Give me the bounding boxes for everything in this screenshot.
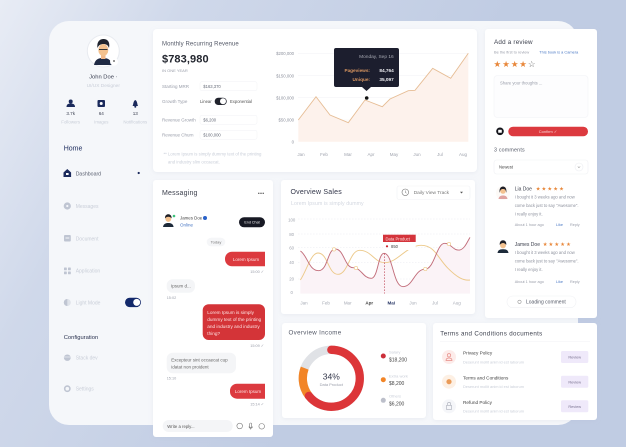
nav: application: Application bbox=[76, 269, 100, 275]
line chart: sales: Jan bbox=[300, 300, 308, 306]
line chart: sales: Jun bbox=[409, 300, 417, 306]
area chart: revenue: 0 bbox=[292, 139, 295, 144]
row: terms and conditions: Deserunt mollit anim id est laborum bbox=[463, 384, 524, 389]
panel: monthly recurring revenue bbox=[153, 29, 477, 172]
line chart: sales: Jul bbox=[432, 300, 438, 306]
income legend: $8,200 bbox=[389, 381, 405, 387]
comment: lia doe: Like bbox=[556, 223, 563, 227]
rating stars: ★ bbox=[493, 60, 501, 70]
bubble: sent 2: and industry and industry bbox=[207, 324, 260, 329]
sales subtitle: Lorem Ipsum is simply dummy bbox=[291, 201, 364, 207]
donut chart: 34% bbox=[323, 372, 340, 382]
nav: settings: Settings bbox=[76, 387, 94, 393]
mrr title: Monthly Recurring Revenue bbox=[162, 41, 239, 47]
stat: notifications bbox=[123, 100, 148, 124]
bubble: received 2 bbox=[167, 353, 236, 380]
chat contact: Online bbox=[180, 222, 194, 228]
daily view dropdown bbox=[397, 186, 470, 200]
area chart: revenue: Aug bbox=[459, 152, 467, 157]
nav: light mode bbox=[64, 298, 141, 307]
profile role: UI/UX Designer bbox=[87, 83, 120, 89]
line chart: sales: 40 bbox=[289, 260, 295, 265]
line chart: sales: 0 bbox=[291, 290, 294, 295]
income legend bbox=[381, 350, 408, 408]
row: refund policy: Review bbox=[568, 404, 581, 409]
comment: james doe: About 1 hour ago bbox=[515, 280, 544, 284]
nav: messages bbox=[64, 202, 99, 210]
nav: messages: Messages bbox=[76, 204, 99, 210]
rating stars bbox=[493, 60, 536, 70]
main panel bbox=[49, 21, 578, 425]
rating stars: ★ bbox=[519, 60, 527, 70]
line chart: sales bbox=[288, 218, 470, 306]
area chart: revenue bbox=[276, 48, 468, 157]
chart tooltip: 35,097 bbox=[379, 77, 394, 82]
chart tooltip: 84,764 bbox=[379, 68, 394, 73]
row: terms and conditions: Terms and Conditions bbox=[463, 375, 509, 380]
comment: james doe bbox=[498, 240, 580, 284]
area chart: revenue: $200,000 bbox=[276, 51, 295, 56]
bubble: received 1: Ipsum d... bbox=[171, 284, 191, 289]
mrr form fields bbox=[162, 82, 257, 139]
panel: overview sales bbox=[281, 180, 475, 314]
panel: terms and conditions bbox=[433, 323, 597, 420]
stat: followers: Followers bbox=[61, 120, 81, 124]
bubble: sent 2: 15:09 ✓ bbox=[250, 344, 264, 348]
mrr footnote bbox=[164, 151, 262, 165]
chart tooltip bbox=[334, 48, 399, 100]
mrr form fields: Growth Type bbox=[162, 99, 188, 104]
mrr form fields: $163,370 bbox=[203, 84, 221, 89]
bubble: received 2: 15:10 bbox=[167, 376, 176, 380]
data tooltip: Data Product bbox=[386, 236, 411, 241]
mrr form fields: Revenue Churn bbox=[162, 133, 194, 138]
bubble: sent 2 bbox=[203, 304, 265, 348]
nav: stack dev bbox=[64, 354, 98, 362]
area chart: revenue: $100,000 bbox=[276, 95, 295, 100]
message input: Write a reply... bbox=[167, 424, 195, 429]
messaging title: Messaging bbox=[162, 190, 198, 197]
area chart: revenue: Apr bbox=[367, 152, 375, 157]
mrr footnote: ** Lorem Ipsum is simply dummy text of the printing bbox=[164, 151, 262, 156]
heading: configuration: Configuration bbox=[64, 335, 98, 341]
mrr form fields: Exponential bbox=[230, 99, 252, 104]
stat: notifications: 13 bbox=[133, 111, 138, 116]
comment: james doe: Like bbox=[556, 280, 563, 284]
row: privacy policy: Review bbox=[568, 355, 581, 360]
comment: lia doe: Lia Doe bbox=[515, 186, 532, 192]
nav: settings bbox=[65, 386, 94, 393]
bubble: received 1 bbox=[167, 279, 195, 300]
message input bbox=[163, 420, 265, 432]
mrr form fields: Linear bbox=[200, 99, 212, 104]
chart tooltip: Unique: bbox=[353, 77, 370, 82]
area chart: revenue: $150,000 bbox=[276, 73, 295, 78]
line chart: sales: 100 bbox=[288, 218, 296, 222]
donut chart: Data Product bbox=[320, 382, 344, 387]
mrr form fields: Starting MRR bbox=[162, 84, 190, 89]
sidebar bbox=[61, 35, 148, 393]
mrr period: IN ONE YEAR bbox=[162, 68, 188, 73]
comment: lia doe: ★★★★★ bbox=[536, 187, 565, 193]
area chart: revenue: Feb bbox=[320, 152, 328, 157]
panel: messaging bbox=[153, 180, 273, 437]
area chart: revenue: Jan bbox=[297, 152, 305, 157]
comment: james doe: I bought it 3 weeks ago and now bbox=[515, 250, 576, 255]
sort select bbox=[494, 160, 588, 174]
review subtitle bbox=[494, 50, 579, 55]
profile name: John Doe · bbox=[89, 74, 118, 80]
chat contact bbox=[163, 214, 265, 228]
nav: dashboard: Dashboard bbox=[76, 171, 101, 177]
income legend: $18,200 bbox=[389, 357, 407, 363]
area chart: revenue: May bbox=[390, 152, 399, 157]
row: privacy policy: Deserunt mollit anim id est laborum bbox=[463, 359, 524, 364]
review title: Add a review bbox=[494, 39, 533, 46]
profile avatar bbox=[87, 35, 119, 67]
panel: add a review bbox=[485, 29, 597, 318]
more menu bbox=[258, 193, 264, 194]
row: privacy policy: Privacy Policy bbox=[463, 351, 493, 356]
stat: images bbox=[94, 100, 109, 124]
review textarea bbox=[494, 76, 588, 117]
bubble: sent 2: thing? bbox=[207, 331, 220, 336]
nav: light mode: Light Mode bbox=[76, 301, 101, 307]
line chart: sales: Apr bbox=[365, 300, 373, 306]
area chart: revenue: $50,000 bbox=[278, 118, 295, 123]
bubble: sent 3: 15:14 ✓ bbox=[250, 403, 264, 407]
donut chart bbox=[303, 350, 360, 407]
comment: james doe: ★★★★★ bbox=[543, 242, 572, 248]
stat: notifications: Notifications bbox=[123, 120, 148, 124]
row: refund policy: Deserunt mollit anim id est laborum bbox=[463, 409, 524, 414]
confirm button: Confirm ✓ bbox=[539, 129, 557, 134]
mrr form fields: Revenue Growth bbox=[162, 118, 196, 123]
bubble: sent 1 bbox=[225, 252, 265, 274]
income legend: Others bbox=[389, 394, 401, 399]
daily view dropdown: Daily View Track bbox=[414, 190, 450, 196]
mrr form fields: $100,000 bbox=[203, 133, 221, 138]
mrr value: $783,980 bbox=[162, 54, 209, 66]
nav: dashboard bbox=[64, 169, 140, 177]
comment: james doe: Reply bbox=[570, 280, 580, 284]
mrr footnote: and industry slim occaecat. bbox=[168, 160, 220, 165]
income title: Overview Income bbox=[288, 330, 342, 337]
income legend: Salary bbox=[389, 350, 400, 354]
loading comment button: Loading comment bbox=[526, 300, 566, 306]
stat: followers bbox=[61, 100, 81, 124]
bubble: sent 1: Lorem Ipsum bbox=[233, 257, 259, 262]
stat: followers: 3.7k bbox=[66, 111, 76, 116]
bubble: received 2: idatat non proident bbox=[171, 364, 209, 370]
line chart: sales: 20 bbox=[289, 277, 295, 282]
bubble: sent 3 bbox=[230, 384, 265, 407]
row: privacy policy bbox=[442, 350, 588, 364]
nav: stack dev: Stack dev bbox=[76, 356, 98, 362]
stat: images: Images bbox=[94, 120, 109, 124]
loading comment button bbox=[507, 296, 576, 308]
comment: james doe: I really enjoy it. bbox=[515, 267, 543, 272]
line chart: sales: Aug bbox=[453, 300, 461, 306]
comment: james doe: come back just to say "Awesome". bbox=[515, 258, 579, 264]
bubble: received 1: 15:02 bbox=[167, 296, 176, 300]
area chart: revenue: Mar bbox=[344, 152, 352, 157]
confirm button bbox=[508, 127, 588, 136]
chat contact: End Chat bbox=[244, 221, 260, 225]
line chart: sales: Feb bbox=[322, 300, 330, 306]
income legend: $6,200 bbox=[389, 402, 405, 408]
reviewer icon bbox=[496, 128, 504, 135]
nav: document bbox=[64, 235, 99, 242]
row: terms and conditions bbox=[442, 375, 588, 389]
area chart: revenue: Jul bbox=[437, 152, 443, 157]
review subtitle: This book is a Camera bbox=[539, 50, 579, 55]
income legend: Extra work bbox=[389, 373, 408, 378]
rating stars: ★ bbox=[502, 60, 510, 70]
comment: lia doe bbox=[496, 186, 580, 227]
comment: lia doe: About 1 hour ago bbox=[515, 223, 544, 227]
row: terms and conditions: Review bbox=[568, 379, 581, 384]
bubble: sent 2: Lorem Ipsum is simply bbox=[207, 310, 255, 315]
terms title: Terms and Conditions documents bbox=[440, 330, 543, 337]
chart tooltip: Pageviews: bbox=[344, 68, 370, 73]
heading: home: Home bbox=[64, 146, 82, 152]
bubble: received 2: Excepteur sint occaecat cup bbox=[171, 358, 228, 362]
bubble: sent 1: 15:00 ✓ bbox=[250, 270, 264, 274]
nav: document: Document bbox=[76, 236, 99, 242]
row: refund policy bbox=[442, 399, 588, 414]
bubble: sent 2: dummy text of the printing bbox=[207, 317, 262, 322]
chart tooltip: Monday, Sep 16 bbox=[359, 54, 394, 60]
line chart: sales: Mai bbox=[388, 300, 395, 306]
date chip: Today bbox=[211, 240, 221, 244]
date chip bbox=[207, 238, 225, 246]
line chart: sales: Mar bbox=[344, 300, 352, 306]
line chart: sales: 80 bbox=[289, 232, 295, 237]
comment: james doe: James Doe bbox=[515, 242, 540, 248]
comment: lia doe: Reply bbox=[570, 223, 580, 227]
nav: application bbox=[64, 268, 100, 275]
data tooltip bbox=[383, 235, 416, 250]
row: refund policy: Refund Policy bbox=[463, 400, 493, 405]
data tooltip: 850 bbox=[391, 244, 399, 249]
line chart: sales: 60 bbox=[289, 246, 295, 250]
review textarea: Share your thoughts ... bbox=[500, 80, 542, 85]
comment: lia doe: I really enjoy it. bbox=[515, 212, 543, 216]
comment: lia doe: come back just to say "Awesome". bbox=[515, 203, 579, 208]
chat contact: James Doe bbox=[180, 216, 203, 220]
panel: overview income bbox=[282, 323, 426, 418]
comments count: 3 comments bbox=[494, 148, 525, 154]
review subtitle: Be the first to review bbox=[494, 50, 529, 55]
mrr form fields: $6,200 bbox=[203, 118, 217, 123]
stat: images: 64 bbox=[99, 111, 104, 116]
bubble: sent 3: Lorem Ipsum bbox=[235, 389, 261, 394]
comment: lia doe: I bought it 3 weeks ago and now bbox=[515, 194, 576, 200]
sales title: Overview Sales bbox=[290, 189, 342, 196]
rating stars: ☆ bbox=[528, 60, 536, 70]
sort select: Newest bbox=[499, 164, 514, 170]
area chart: revenue: Jun bbox=[413, 152, 421, 157]
rating stars: ★ bbox=[511, 60, 519, 70]
